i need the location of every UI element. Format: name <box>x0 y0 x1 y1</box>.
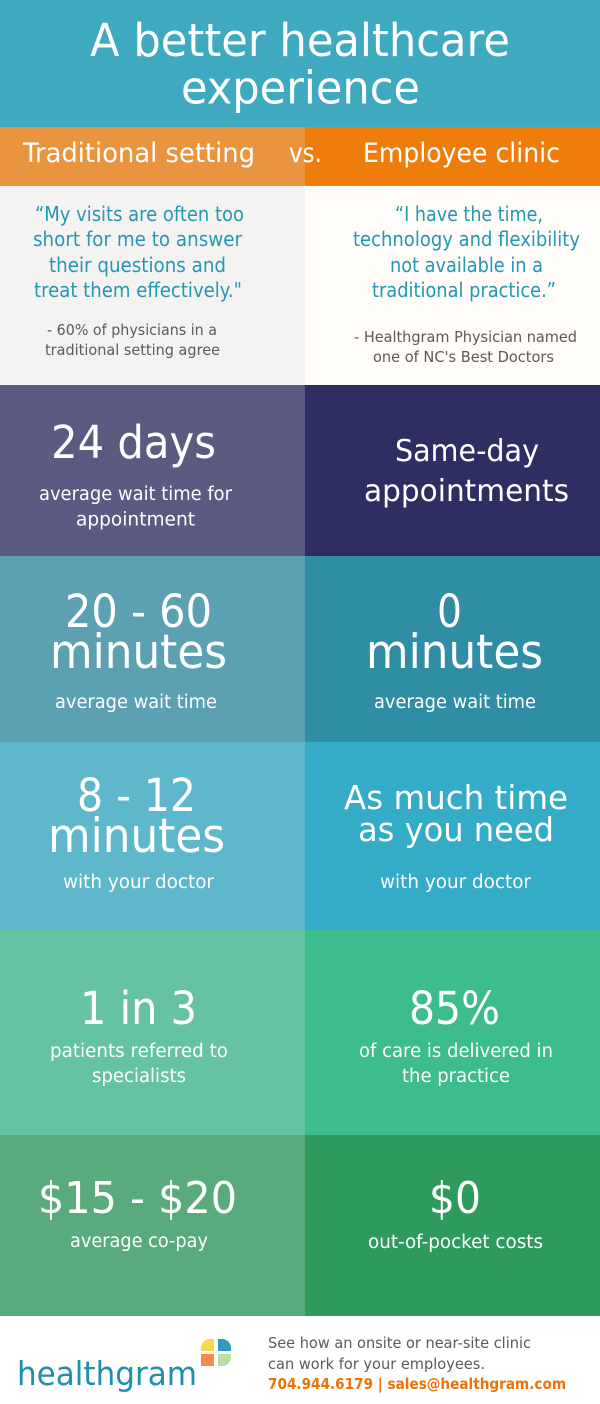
panel: appointment wait clinic <box>305 385 600 556</box>
panel: employee clinic quote <box>305 186 600 385</box>
panel: traditional quote: treat them effectively." <box>34 278 242 302</box>
panel: care delivered clinic: the practice <box>402 1066 510 1087</box>
panel: office wait traditional: average wait time <box>55 692 217 713</box>
comparison header: Employee clinic <box>363 138 560 169</box>
panel: employee clinic quote: technology and flexibility <box>353 227 580 251</box>
footer call to action: can work for your employees. <box>268 1355 485 1373</box>
panel: care delivered clinic: of care is delivered in <box>359 1041 553 1062</box>
panel: traditional quote: their questions and <box>49 253 226 277</box>
panel: appointment wait traditional: 24 days <box>51 416 216 469</box>
title banner <box>0 0 600 127</box>
healthgram logo <box>17 1339 231 1393</box>
footer call to action: See how an onsite or near-site clinic <box>268 1334 531 1352</box>
panel: traditional quote: - 60% of physicians in a <box>47 321 217 339</box>
panel: office wait clinic <box>305 556 600 742</box>
panel: out-of-pocket clinic: out-of-pocket costs <box>368 1232 543 1253</box>
comparison header <box>0 127 600 186</box>
panel: out-of-pocket clinic <box>305 1135 600 1316</box>
panel: co-pay traditional: $15 - $20 <box>38 1173 237 1224</box>
comparison header: Traditional setting <box>22 138 255 169</box>
panel: office wait traditional: 20 - 60 <box>65 585 212 638</box>
panel: traditional quote <box>0 186 305 385</box>
title banner: A better healthcare <box>90 14 510 67</box>
panel: employee clinic quote: “I have the time, <box>395 202 543 226</box>
panel: doctor time traditional <box>0 742 305 930</box>
panel: appointment wait clinic: appointments <box>364 474 569 509</box>
panel: office wait clinic: 0 <box>437 585 462 638</box>
panel: co-pay traditional: average co-pay <box>70 1231 208 1252</box>
panel: employee clinic quote: not available in a <box>390 253 543 277</box>
panel: doctor time clinic: As much time <box>344 778 568 817</box>
panel: employee clinic quote: one of NC's Best Doctors <box>373 348 554 366</box>
panel: referrals traditional: specialists <box>92 1066 186 1087</box>
panel: referrals traditional <box>0 930 305 1135</box>
panel: doctor time traditional: minutes <box>48 809 225 864</box>
panel: office wait traditional <box>0 556 305 742</box>
panel: traditional quote: “My visits are often too <box>35 202 244 226</box>
panel: doctor time traditional: with your doctor <box>63 872 214 893</box>
panel: doctor time clinic <box>305 742 600 930</box>
panel: doctor time traditional: 8 - 12 <box>77 769 196 822</box>
footer call to action: 704.944.6179 | sales@healthgram.com <box>268 1375 566 1394</box>
panel: care delivered clinic <box>305 930 600 1135</box>
panel: office wait clinic: average wait time <box>374 692 536 713</box>
panel: referrals traditional: 1 in 3 <box>80 982 197 1035</box>
healthgram logo: healthgram <box>17 1354 197 1393</box>
comparison header: vs. <box>289 138 322 169</box>
icon: four-colour logo mark <box>201 1339 231 1366</box>
panel: employee clinic quote: - Healthgram Physician named <box>354 328 577 346</box>
panel: co-pay traditional <box>0 1135 305 1316</box>
panel: doctor time clinic: with your doctor <box>380 872 531 893</box>
panel: referrals traditional: patients referred to <box>50 1041 228 1062</box>
panel: office wait clinic: minutes <box>366 625 543 680</box>
panel: out-of-pocket clinic: $0 <box>429 1173 481 1224</box>
panel: office wait traditional: minutes <box>50 625 227 680</box>
panel: traditional quote: traditional setting agree <box>45 341 220 359</box>
panel: care delivered clinic: 85% <box>409 982 500 1035</box>
panel: appointment wait traditional <box>0 385 305 556</box>
panel: appointment wait traditional: average wait time for <box>39 484 232 505</box>
title banner: experience <box>181 62 420 114</box>
footer call to action <box>268 1334 566 1394</box>
panel: appointment wait traditional: appointment <box>76 510 195 530</box>
panel: appointment wait clinic: Same-day <box>395 434 539 469</box>
panel: doctor time clinic: as you need <box>358 810 554 849</box>
panel: employee clinic quote: traditional practice.” <box>372 278 556 302</box>
panel: traditional quote: short for me to answer <box>33 227 243 251</box>
